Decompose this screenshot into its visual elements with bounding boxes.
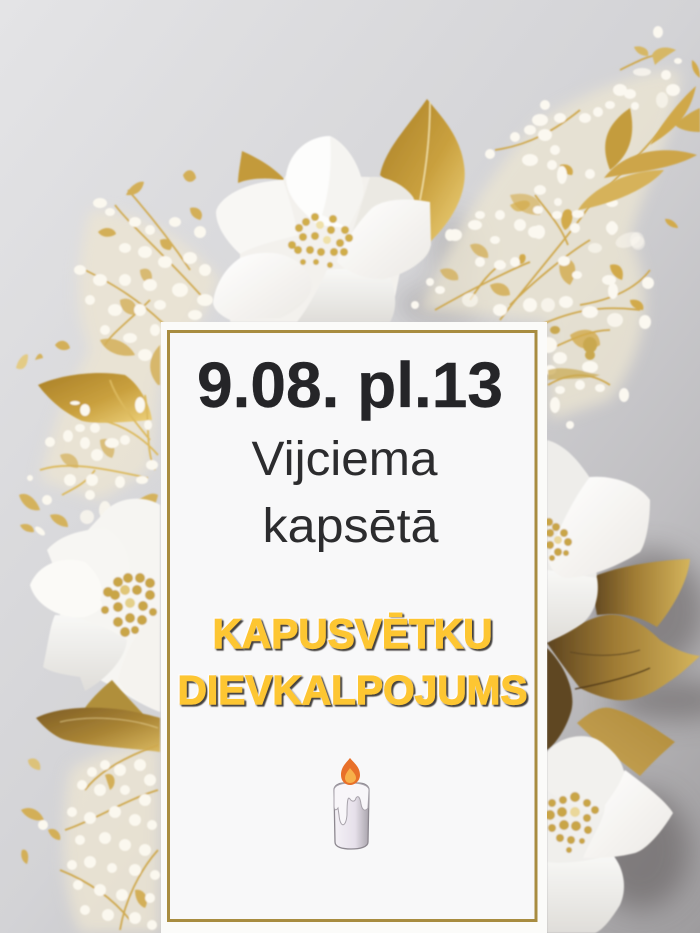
white petals (230, 175, 431, 322)
gold leaves: lower left (36, 680, 160, 752)
gold leaf: top right (380, 99, 465, 242)
spray: upper right branch (411, 26, 700, 429)
card background (161, 322, 547, 933)
flower: left (30, 499, 160, 712)
gold leaf: left upper (38, 373, 152, 423)
stamen (288, 213, 353, 268)
gold leaf: top left (238, 151, 286, 183)
location line one: Vijciema (252, 433, 438, 486)
event title (178, 610, 528, 713)
location line two: kapsētā (262, 500, 439, 553)
gold leaves on right spray (440, 46, 700, 349)
date and time heading: 9.08. pl.13 (197, 349, 503, 421)
gold leaf: right large (547, 615, 700, 700)
spray: middle left branch (19, 354, 158, 537)
spray: upper left branch (16, 170, 213, 385)
event title: KAPUSVĒTKU (212, 610, 492, 657)
white buds on right spray (411, 26, 682, 429)
gold accents on lower right spray (548, 326, 600, 380)
icon: candle (334, 758, 369, 849)
gold leaf: right lower (577, 708, 675, 776)
soft shadows (395, 215, 700, 910)
event title: DIEVKALPOJUMS (178, 667, 528, 713)
white petals (60, 499, 160, 712)
spray: lower left branch (21, 745, 160, 930)
gold frame (168, 332, 536, 920)
notice card (161, 322, 547, 933)
stamen (101, 573, 157, 637)
gold leaf: right dark (547, 648, 572, 750)
flower: right upper (545, 440, 650, 642)
flower: top (213, 136, 431, 322)
main branch gold leaves (578, 86, 700, 210)
flower: right lower (545, 736, 673, 933)
gold leaf: right upper (590, 559, 690, 627)
